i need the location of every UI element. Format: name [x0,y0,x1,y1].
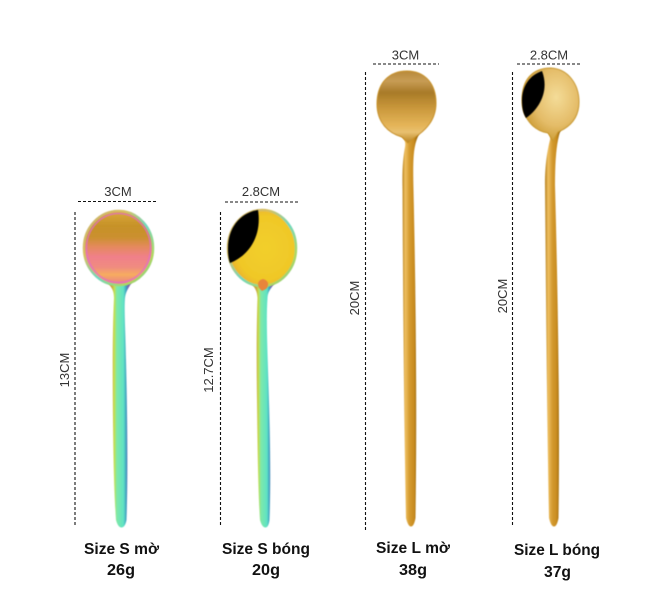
spoon: Size S matte rainbow [84,211,153,528]
caption: Size L mờ 38g: 38g [399,562,427,579]
caption: Size S bóng 20g: Size S bóng [222,541,310,558]
spoon: Size L glossy gold [522,68,579,526]
spoon: Size L matte gold [377,71,436,526]
height label: 20CM first: 20CM [347,281,362,315]
caption: Size S bóng 20g [222,541,310,579]
height label: 13CM: 13CM [57,353,72,387]
dimension lines: Size L glossy [512,64,581,526]
width label: 2.8CM small: 2.8CM [242,184,280,199]
width label: 3CM large: 3CM [392,48,419,62]
dimension lines: Size S matte [75,202,157,527]
caption: Size L bóng 37g [514,542,600,581]
height label: 12.7CM: 12.7CM [201,347,216,393]
spoon: Size S glossy rainbow [228,210,296,528]
caption: Size L bóng 37g: 37g [544,564,571,581]
height label: 20CM second: 20CM [495,279,510,313]
caption: Size S mờ 26g: Size S mờ [84,541,160,558]
caption: Size S mờ 26g: 26g [107,562,135,579]
caption: Size L mờ 38g [376,540,451,579]
dimension lines: Size S glossy [220,202,299,525]
caption: Size L mờ 38g: Size L mờ [376,540,451,557]
width label: 2.8CM large: 2.8CM [530,48,568,62]
caption: Size S mờ 26g [84,541,160,579]
caption: Size L bóng 37g: Size L bóng [514,542,600,559]
caption: Size S bóng 20g: 20g [252,562,280,579]
dimension lines: Size L matte [366,64,439,530]
width label: 3CM small: 3CM [104,184,132,199]
